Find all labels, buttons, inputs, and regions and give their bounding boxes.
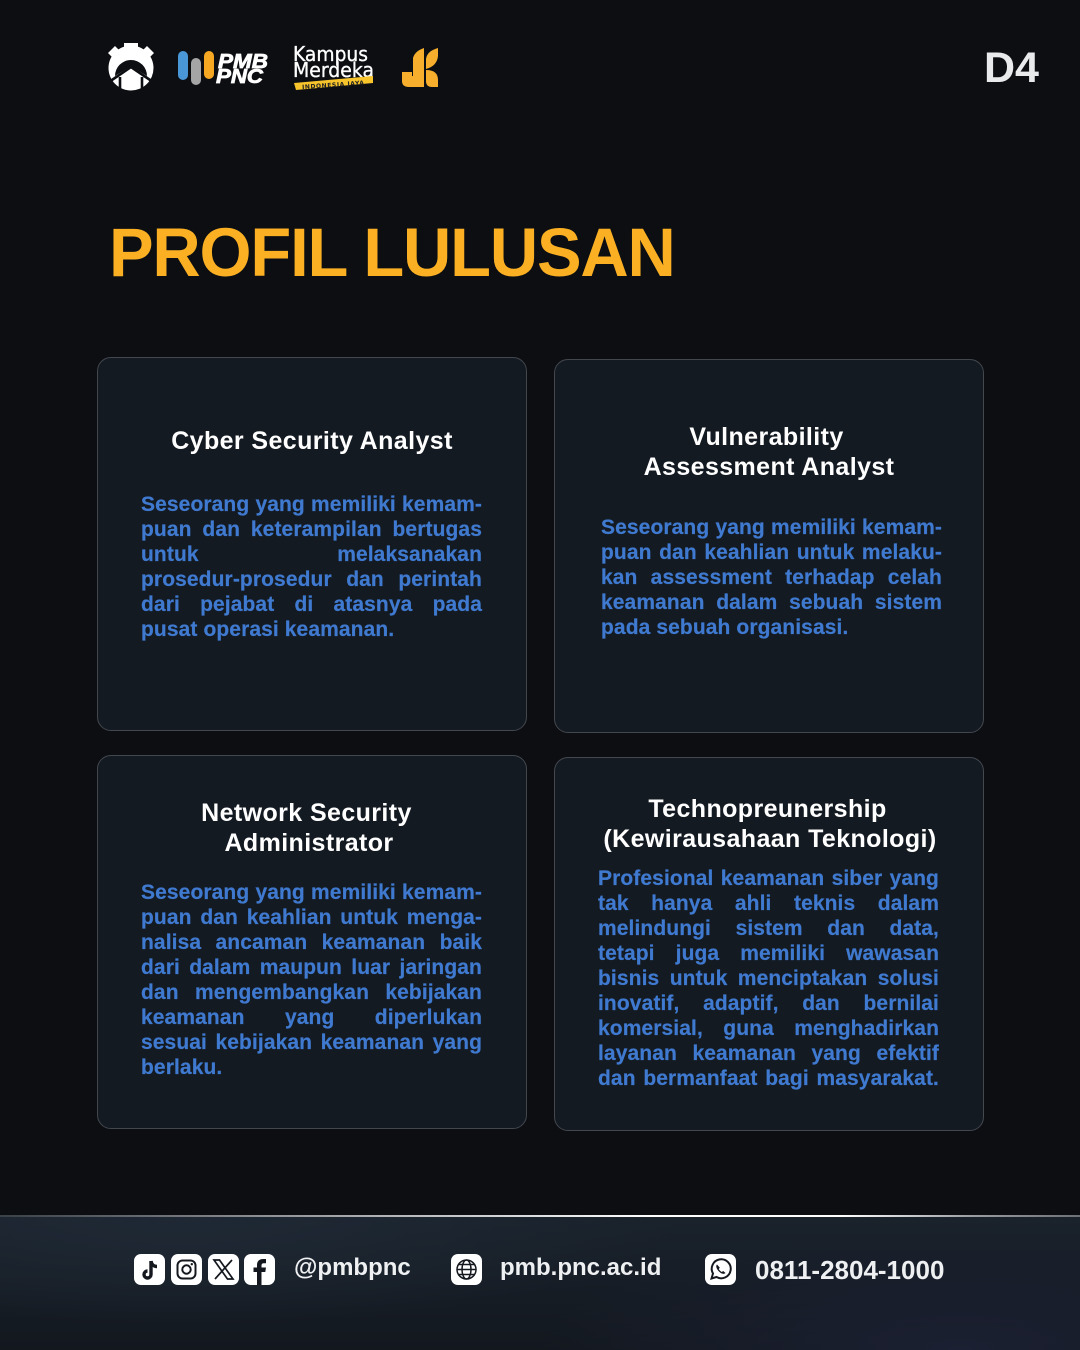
phone number: 0811-2804-1000 — [755, 1255, 944, 1285]
description: puan dan keahlian untuk menga- — [141, 906, 482, 928]
description: keamanan dalam sebuah sistem — [601, 591, 942, 614]
D4 label: D4 — [984, 44, 1039, 92]
panel: Vulnerability Assessment Analyst — [554, 359, 984, 733]
Kampus Merdeka logo — [293, 42, 374, 91]
Kampus Merdeka logo: INDONESIA JAYA — [302, 80, 365, 91]
description: dari dalam maupun luar jaringan — [141, 956, 482, 978]
description: inovatif, adaptif, dan bernilai — [598, 992, 939, 1014]
description: Seseorang yang memiliki kemam- — [141, 880, 482, 904]
description: dan mengembangkan kebijakan — [141, 980, 482, 1004]
PMB PNC wordmark: PNC — [216, 66, 264, 88]
description — [598, 866, 939, 1090]
description: dari pejabat di atasnya pada — [141, 592, 482, 616]
icon: JK logo — [402, 48, 438, 87]
description: komersial, guna menghadirkan — [598, 1016, 939, 1040]
icon: tiktok — [134, 1254, 165, 1285]
heading: Administrator — [224, 829, 394, 857]
footer band — [0, 1215, 1080, 1350]
icon: whatsapp — [705, 1254, 736, 1285]
icon: X — [208, 1254, 239, 1285]
panel: Cyber Security Analyst — [97, 357, 527, 731]
description — [601, 516, 942, 639]
Kampus Merdeka logo: Merdeka — [293, 58, 374, 82]
heading — [201, 799, 412, 857]
heading: Cyber Security Analyst — [171, 427, 453, 455]
description: puan dan keahlian untuk melaku- — [601, 541, 942, 564]
description: untuk melaksanakan — [141, 542, 482, 566]
description: kan assessment terhadap celah — [601, 566, 942, 589]
description: layanan keamanan yang efektif — [598, 1042, 939, 1064]
description: Seseorang yang memiliki kemam- — [601, 516, 942, 539]
description: berlaku. — [141, 1056, 222, 1078]
description: tak hanya ahli teknis dalam — [598, 892, 939, 914]
heading — [644, 423, 894, 481]
icon: gear logo — [108, 43, 154, 91]
website: pmb.pnc.ac.id — [500, 1254, 661, 1281]
icon: globe — [451, 1254, 482, 1285]
heading: (Kewirausahaan Teknologi) — [603, 825, 937, 853]
description: sesuai kebijakan keamanan yang — [141, 1030, 482, 1054]
description: pada sebuah organisasi. — [601, 616, 848, 639]
icon: instagram — [171, 1254, 202, 1285]
Kampus Merdeka logo: Kampus — [293, 42, 368, 66]
description: keamanan yang diperlukan — [141, 1006, 482, 1028]
icon: facebook — [244, 1254, 275, 1285]
heading: Vulnerability — [689, 423, 844, 451]
description: Seseorang yang memiliki kemam- — [141, 492, 482, 516]
logo row — [108, 42, 438, 91]
description — [141, 880, 482, 1078]
description: nalisa ancaman keamanan baik — [141, 930, 482, 954]
title: PROFIL LULUSAN — [109, 214, 675, 291]
heading: Assessment Analyst — [644, 453, 894, 481]
PMB PNC wordmark — [216, 51, 268, 88]
description: puan dan keterampilan bertugas — [141, 518, 482, 540]
description — [141, 492, 482, 641]
description: dan bermanfaat bagi masyarakat. — [598, 1066, 939, 1090]
panel: Network Security Administrator — [97, 755, 527, 1129]
PMB PNC wordmark: PMB — [218, 51, 268, 73]
heading: Technopreunership — [648, 795, 887, 823]
heading: Network Security — [201, 799, 412, 827]
icon: PMB PNC bars — [178, 51, 214, 85]
description: bisnis untuk menciptakan solusi — [598, 966, 939, 990]
description: tetapi juga memiliki wawasan — [598, 942, 939, 964]
description: Profesional keamanan siber yang — [598, 866, 939, 890]
description: pusat operasi keamanan. — [141, 618, 394, 640]
description: prosedur-prosedur dan perintah — [141, 568, 482, 590]
panel: Technopreunership — [554, 757, 984, 1131]
heading — [603, 795, 937, 853]
description: melindungi sistem dan data, — [598, 916, 939, 940]
footer top line — [0, 1215, 1080, 1217]
social handle: @pmbpnc — [294, 1254, 411, 1281]
